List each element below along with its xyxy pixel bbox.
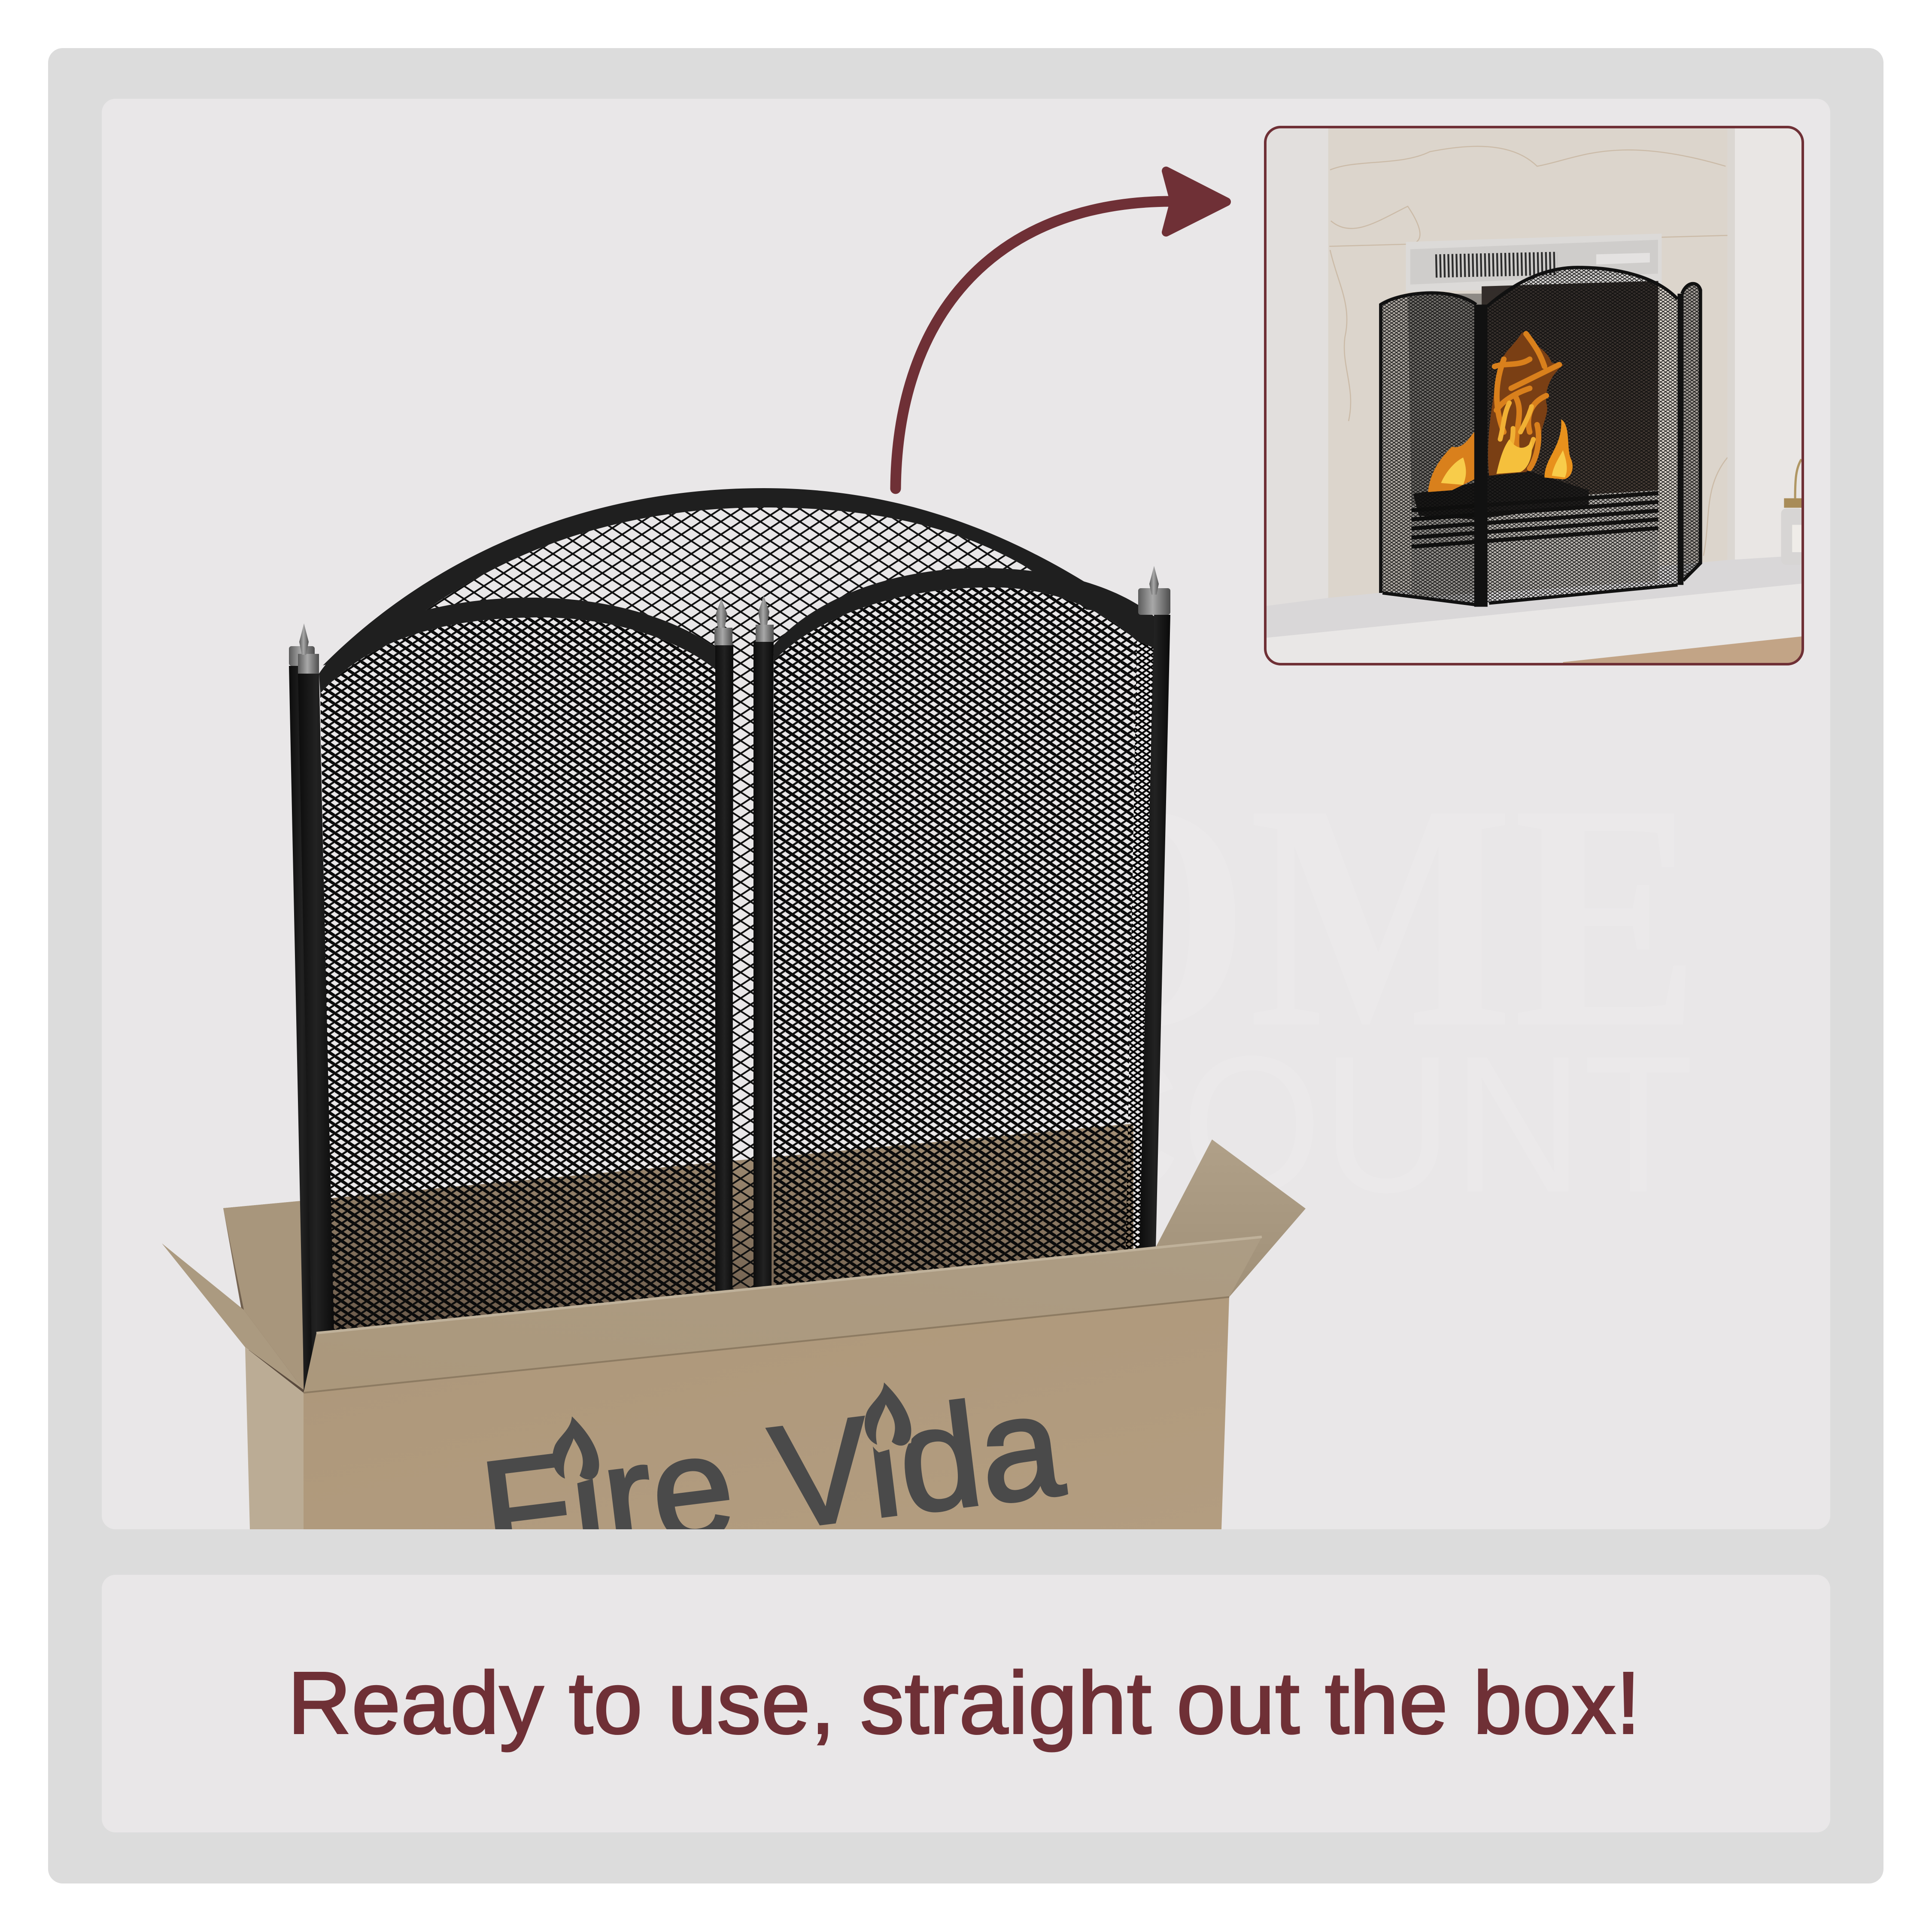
- back panel mesh: [378, 507, 1086, 1292]
- wood floor: [1563, 636, 1807, 668]
- fold line: [304, 1297, 1229, 1393]
- marble surround: [1328, 128, 1728, 601]
- inset border: [1265, 127, 1803, 664]
- inset photo: fireplace with installed screen: [1260, 122, 1807, 668]
- jar: [1781, 459, 1803, 565]
- logo: Fire Vida: [473, 1363, 1071, 1595]
- panel: main image area: [102, 99, 1830, 1529]
- arrow: curved arrow pointing to the installed photo: [896, 171, 1227, 489]
- left front arch frame: [319, 598, 715, 693]
- box front face: [304, 1297, 1229, 1529]
- logo: Fire Vida: Vida: [763, 1363, 1071, 1560]
- vents: [1435, 264, 1558, 266]
- box front top flap: [304, 1237, 1262, 1393]
- centre screen panel: [1487, 267, 1677, 603]
- right pillar: [1735, 126, 1807, 559]
- appliance top: [1406, 234, 1662, 292]
- lower steel: [1411, 490, 1659, 598]
- logo: Fire Vida: Fire: [473, 1403, 742, 1595]
- right screen panel: [1683, 285, 1701, 581]
- right front panel mesh: [774, 587, 1137, 1288]
- left screen panel: [1382, 294, 1478, 605]
- firebox interior: [1482, 281, 1659, 501]
- panel: caption: [102, 1575, 1830, 1832]
- shelf front: [1260, 583, 1807, 668]
- flames: [1428, 332, 1573, 492]
- back panel arch frame: [323, 488, 1133, 665]
- control panel: [1596, 253, 1650, 264]
- fire screen product: [289, 488, 1170, 1391]
- side folded panel mesh: [1126, 641, 1155, 1252]
- box: front of the cardboard box: [245, 1236, 1262, 1529]
- watermark text: HOME: [813, 738, 1700, 1094]
- caption text: Ready to use, straight out the box!: [288, 1654, 1640, 1752]
- watermark text: [749, 738, 1700, 1233]
- wall: [1267, 128, 1563, 663]
- frames: [1381, 267, 1701, 605]
- shelf top: [1260, 555, 1807, 638]
- area seen through left panel: [1408, 294, 1482, 507]
- stripes: [1411, 493, 1659, 547]
- posts: [289, 615, 1170, 1391]
- box: back parts seen behind the screen: [162, 1124, 1306, 1400]
- finials and caps: [289, 566, 1170, 674]
- watermark text: DISCOUNT: [749, 1015, 1694, 1233]
- box left side: [245, 1347, 304, 1529]
- left front panel mesh: [320, 617, 715, 1380]
- logs: [1413, 459, 1589, 519]
- right front arch frame: [774, 568, 1155, 661]
